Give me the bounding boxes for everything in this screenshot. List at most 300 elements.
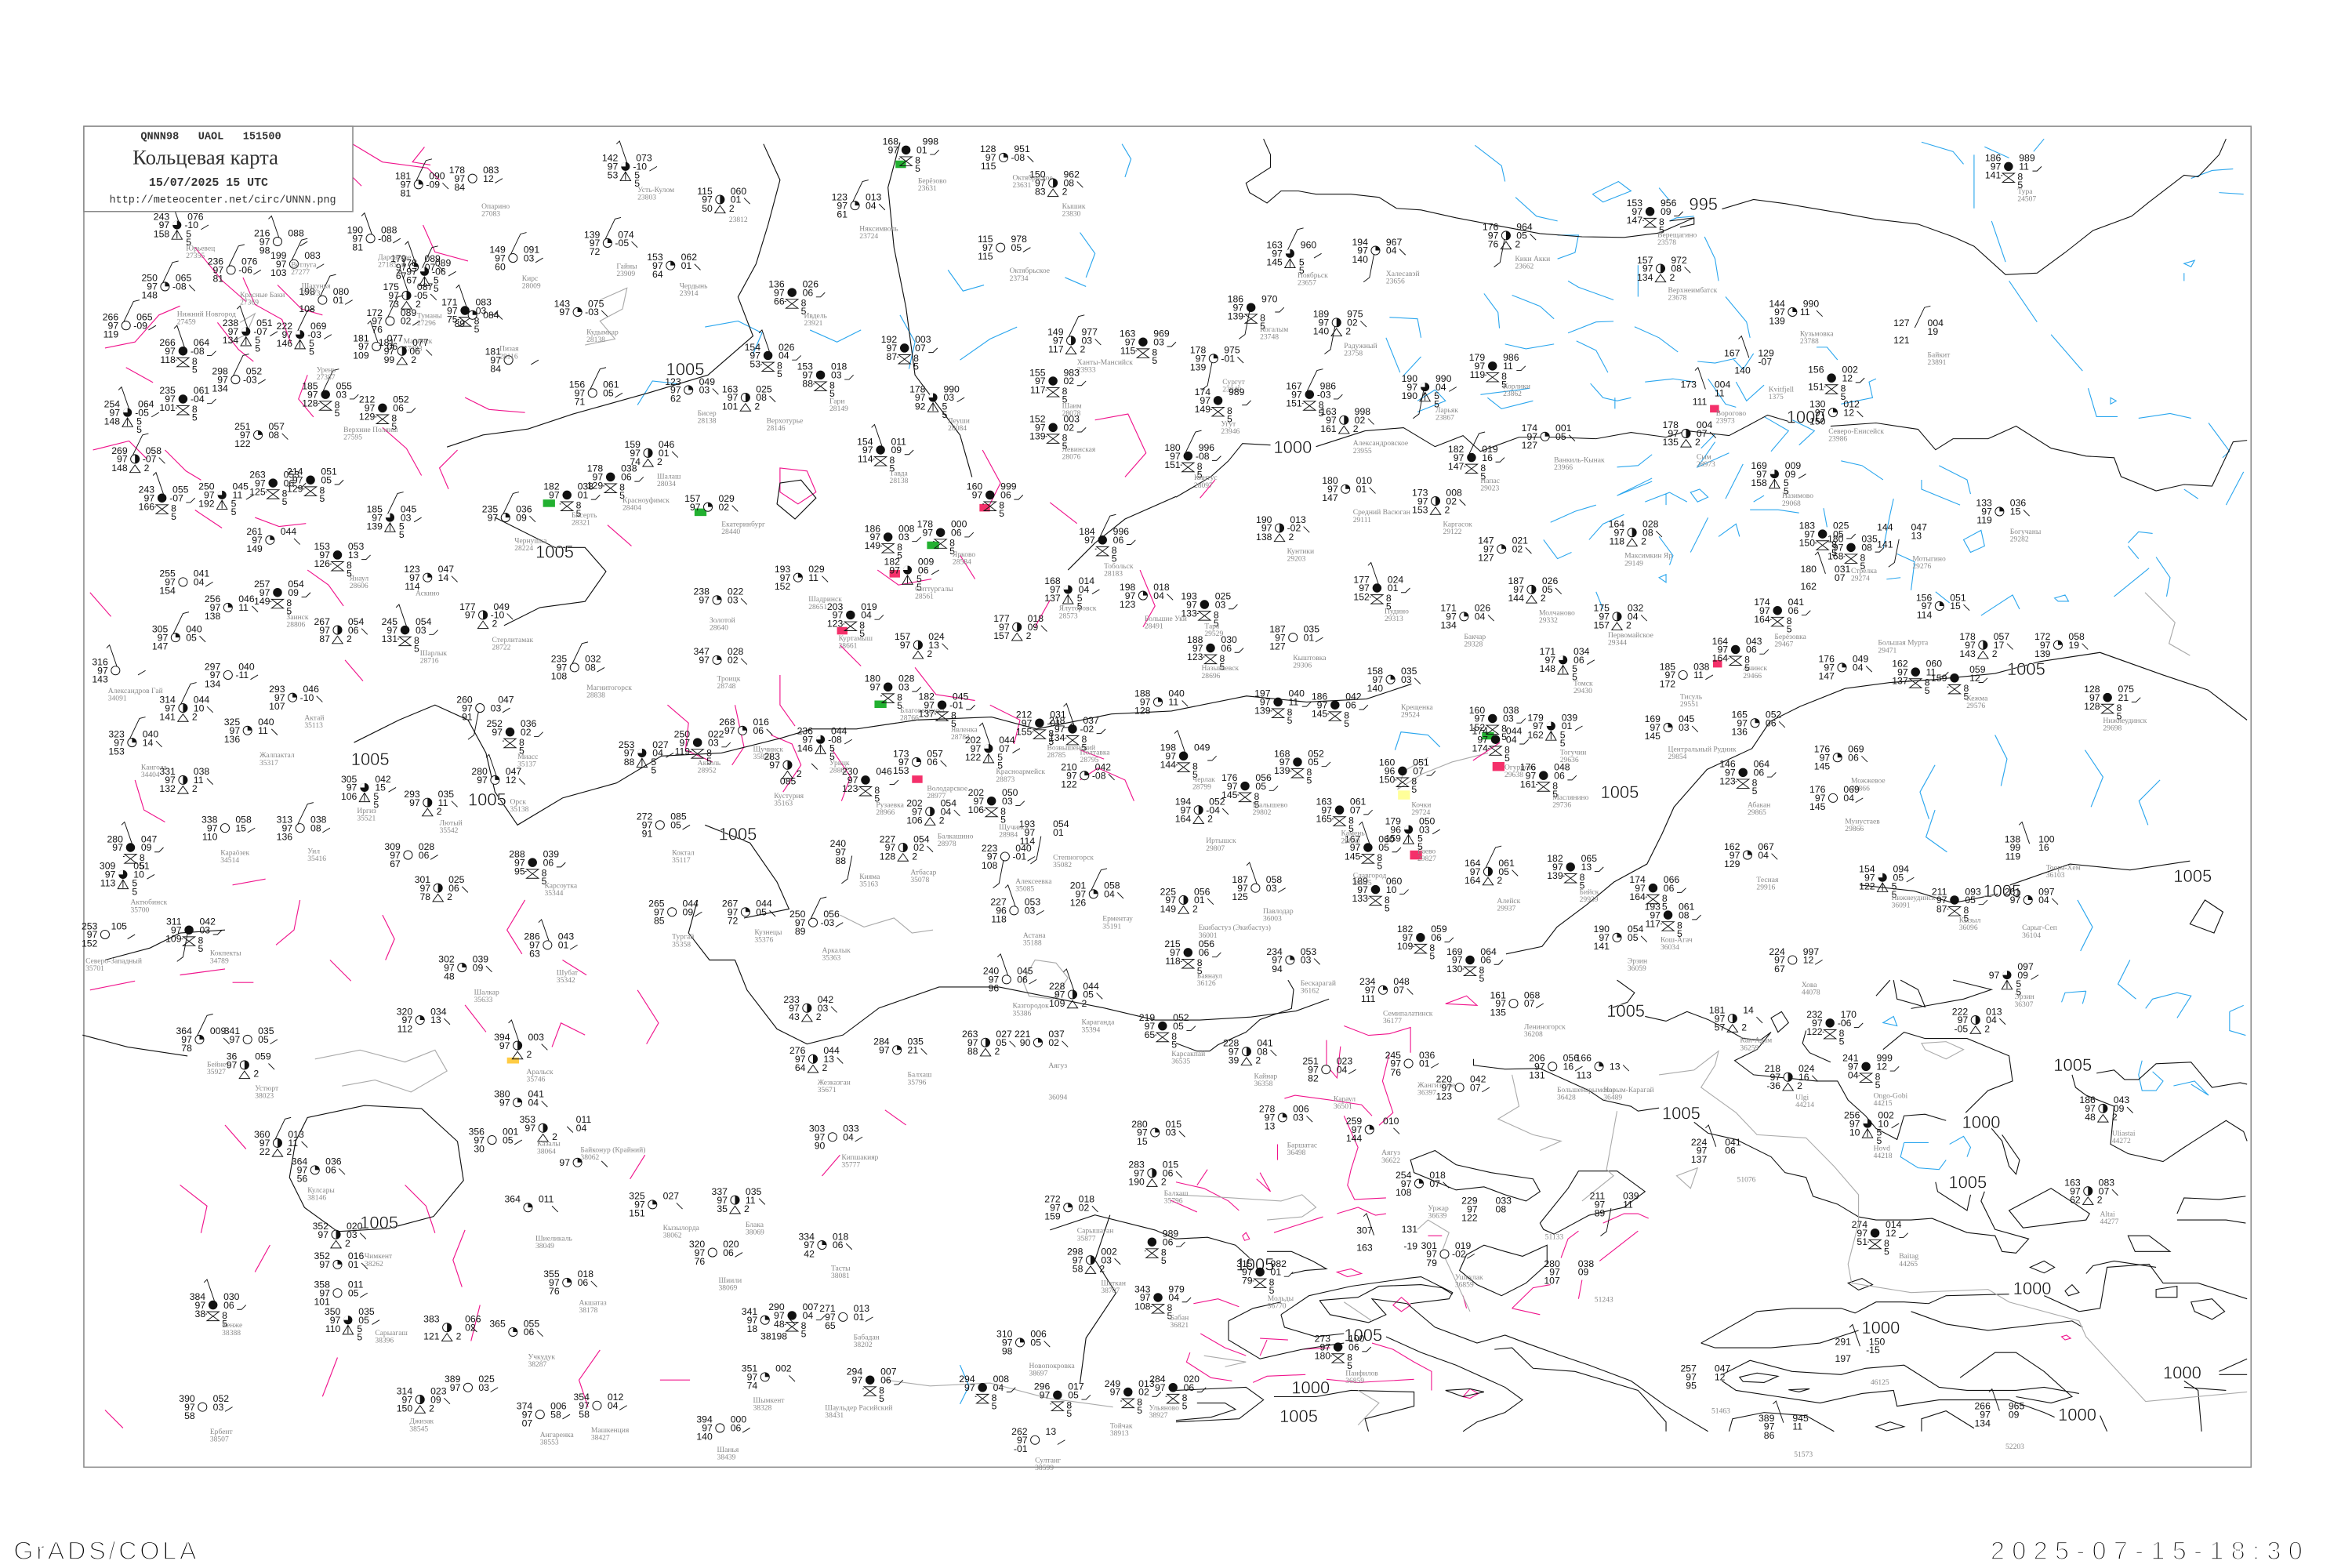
station 36639b [1396, 1170, 1449, 1221]
station 27369: 97 [212, 265, 223, 276]
contour labels: 1000 [1962, 1112, 2001, 1132]
station 27277: 27277 [291, 268, 310, 277]
station 23748: 23748 [1260, 332, 1279, 341]
station 28225: 235 [482, 503, 498, 514]
station 36859 panfilov: 100 [1348, 1333, 1365, 1344]
station 240 [983, 954, 1036, 994]
station 36177b: Семипалатинск [1383, 1009, 1433, 1018]
station 27355: -10 [184, 220, 198, 230]
station 23862: 11 [1503, 361, 1513, 372]
station 23933: Ханты-Мансийск [1077, 358, 1133, 367]
station 338: 110 [202, 831, 218, 842]
station 23909 [584, 217, 637, 278]
station 280b: 12 [506, 775, 517, 786]
station 36770: Мольды [1268, 1294, 1294, 1303]
station 23758: 189 [1313, 309, 1329, 320]
station 257: 047 [1715, 1363, 1730, 1374]
station 186: 186 [865, 523, 880, 534]
station 28966: Рузаевка [876, 800, 905, 809]
station 320: 97 [402, 1014, 412, 1025]
station 36358: Кайнар [1254, 1073, 1277, 1081]
station 29466: 97 [1717, 644, 1728, 655]
station 29551: 038 [1693, 661, 1710, 672]
station 35363: Аркалык [822, 946, 851, 955]
station 232: 170 [1841, 1009, 1857, 1020]
station 243b: 97 [143, 492, 154, 503]
station 28661: 203 [827, 601, 843, 612]
station 28716: 131 [382, 633, 397, 644]
station 255 [159, 568, 213, 597]
station 28748: 028 [728, 646, 744, 657]
station 28977: 28977 [927, 792, 946, 800]
station 23657: 960 [1301, 240, 1316, 251]
contour labels: 1005 [2173, 866, 2212, 886]
station 46125: 150 [1869, 1336, 1886, 1347]
station 44214: -36 [1766, 1080, 1780, 1091]
station 115: 01 [731, 194, 742, 205]
station 36729: 58 [1073, 1263, 1083, 1274]
station 23921: 23921 [804, 319, 823, 328]
station 27369: 236 [208, 256, 223, 267]
station 44265: 51 [1857, 1236, 1867, 1247]
station 29068: 09 [1785, 469, 1796, 480]
station 36729: 298 [1067, 1246, 1083, 1257]
station 23678: 157 [1637, 255, 1653, 266]
station 38178: 018 [578, 1269, 593, 1279]
station 29736: 048 [1554, 761, 1570, 772]
station 29149: 118 [1610, 536, 1624, 547]
station 147: 021 [1512, 535, 1528, 546]
station 29945: 164 [1629, 891, 1646, 902]
station 36034: 36034 [1661, 943, 1679, 952]
station 51133: 280 [1544, 1258, 1560, 1269]
station 252: Миасс [517, 753, 538, 761]
station 38545: 38545 [409, 1425, 428, 1433]
station 29282 [1976, 498, 2042, 544]
station 38431: 97 [852, 1374, 862, 1385]
station 229: 08 [1496, 1203, 1506, 1214]
station 29916 [1724, 841, 1779, 892]
station 28138b: 97 [862, 445, 873, 456]
station 28146: 101 [722, 401, 739, 412]
station 338: Караöзек [220, 849, 250, 858]
station 147: 02 [1512, 543, 1523, 554]
station 1375: 167 [1724, 347, 1740, 358]
station 28138: -03 [585, 307, 599, 318]
station 36489: 113 [1576, 1070, 1592, 1081]
station 35078: Атбасар [910, 868, 937, 877]
station 27355: Юрьевец [186, 245, 215, 253]
station 28146: 28146 [767, 424, 786, 433]
contour labels: 1005 [351, 750, 390, 769]
station 351: Шымкент [753, 1396, 785, 1405]
station 36397: Жангизтобе [1417, 1081, 1455, 1090]
station 23909: 72 [590, 246, 601, 257]
station 27369: 076 [241, 256, 258, 267]
station 35394 [1012, 969, 1115, 1034]
station 23849: 97 [1196, 353, 1206, 364]
station 351: 74 [747, 1381, 757, 1392]
contour labels: 1000 [1787, 408, 1825, 427]
station 36738: 15 [1137, 1136, 1148, 1147]
station 29529 [1181, 590, 1237, 638]
station 250b: 192 [198, 499, 215, 510]
station 44277: 163 [2064, 1177, 2081, 1188]
station 29274: 29274 [1851, 574, 1870, 583]
station 263b: 263 [962, 1029, 978, 1040]
station 341: 97 [230, 1034, 240, 1045]
station 34789: 109 [165, 934, 182, 945]
station 114 [404, 564, 458, 598]
station 314: 044 [194, 694, 209, 705]
station 35777: 303 [809, 1123, 825, 1134]
station 23914: 97 [652, 260, 663, 271]
station 29328b: Бакчар [1464, 633, 1486, 641]
station 23914: 062 [681, 252, 697, 263]
station 28116: 28116 [499, 352, 518, 361]
grey coastlines south-east traced [1176, 1042, 2247, 1425]
station 28116 [485, 345, 539, 374]
station 28873: 202 [965, 735, 981, 746]
station 29344: 04 [1628, 612, 1639, 622]
station 28573b: 018 [1028, 613, 1044, 624]
station 36489 [1576, 1053, 1654, 1102]
station 28978: 054 [941, 797, 956, 808]
station 27595: Верхние Поляны [343, 426, 398, 434]
station 29466: 164 [1712, 636, 1728, 647]
station 28785: 212 [1016, 710, 1033, 720]
station 162 [1892, 658, 1948, 696]
station 23631: 998 [923, 136, 938, 147]
station 36498: 03 [1293, 1112, 1304, 1123]
station 320b: 020 [723, 1239, 739, 1250]
station 35085: 35085 [1015, 884, 1034, 893]
station 28009: 091 [524, 244, 539, 255]
station 28097 [1164, 430, 1221, 490]
station 36094 [1014, 1029, 1068, 1102]
station 23758: 975 [1347, 309, 1363, 320]
station 131: 131 [1402, 1224, 1417, 1235]
station 35085: -01 [1012, 851, 1026, 862]
station 294b [959, 1374, 1015, 1412]
station 115 [697, 186, 750, 224]
station 35927: Бейнет [207, 1060, 230, 1069]
station 27296: Туманы [417, 312, 442, 321]
station 36729: 38707 [1101, 1287, 1120, 1295]
station 27369: -06 [238, 265, 252, 276]
station 250b: 045 [233, 481, 249, 492]
station 360: 013 [288, 1129, 304, 1140]
station 35188: Астана [1023, 931, 1046, 940]
station 27373: 080 [333, 286, 349, 297]
station 35163: Кустурия [774, 792, 804, 800]
station 23867: Ларьяк [1436, 406, 1458, 415]
station 288 [509, 848, 578, 898]
station 27632: 27387 [317, 373, 336, 382]
station 154: 04 [779, 350, 789, 361]
station 186: 008 [898, 523, 915, 534]
station 29149: Максимкин Яр [1624, 552, 1672, 561]
station 28039: 108 [551, 671, 567, 682]
station 36162 [1266, 946, 1336, 996]
station 34700: 10 [133, 869, 144, 880]
station 29724: 29724 [1411, 808, 1430, 817]
station 29306: 187 [1269, 623, 1286, 634]
station 38202: 013 [854, 1303, 869, 1314]
station 28552: 182 [884, 556, 900, 567]
station 23656: Халесавэй [1386, 270, 1420, 278]
station 29864: 97 [1725, 768, 1736, 779]
station 35927: 78 [181, 1043, 192, 1054]
station 35342: 01 [558, 940, 569, 951]
station 38178: 76 [549, 1286, 560, 1297]
station 218: 218 [1049, 715, 1065, 726]
station 38545: Джизак [409, 1417, 434, 1426]
station 36639b: 108 [1396, 1187, 1412, 1198]
station 28606: 153 [314, 541, 330, 552]
station 35163: 283 [764, 751, 780, 762]
station 36770: 01 [1271, 1267, 1281, 1278]
station 29430: 29430 [1573, 687, 1592, 695]
station 28039: 235 [551, 654, 567, 665]
station 23955: 998 [1355, 406, 1370, 417]
station 257 [254, 579, 310, 630]
station 27355 [154, 199, 215, 260]
station 27355: 076 [187, 211, 204, 222]
station 323: Кангола [141, 764, 168, 772]
station 29928: 97 [1357, 884, 1368, 895]
station 38146 [292, 1156, 345, 1203]
station 229: 229 [1461, 1195, 1478, 1206]
station 36096 [1932, 886, 1987, 932]
station 27296: 089 [401, 307, 416, 318]
station 222: 97 [281, 329, 292, 340]
station 257: 09 [288, 587, 299, 598]
station 36177b: 97 [1365, 985, 1376, 996]
station 28148: Бисер [698, 409, 717, 418]
station 51133: 107 [1544, 1276, 1560, 1287]
station 29636: 162 [1527, 729, 1544, 740]
station 28404: 038 [621, 463, 637, 474]
station 182: 109 [1397, 941, 1413, 952]
station 176b: 176 [1221, 772, 1238, 783]
station 36096: 093 [1965, 886, 1981, 897]
station 147: 127 [1478, 553, 1494, 564]
station 997: 44078 [1802, 988, 1820, 996]
station 38507: 03 [213, 1402, 223, 1413]
station 23955: 02 [1355, 415, 1365, 426]
station 27083: 81 [401, 188, 411, 199]
station 190: -08 [378, 233, 392, 244]
station 44215 [1842, 1053, 1908, 1108]
station 44265: 274 [1852, 1219, 1867, 1230]
station 35342: 63 [529, 949, 540, 960]
station 305: 040 [186, 623, 202, 634]
station 38062: 027 [663, 1191, 679, 1202]
station 35163 [764, 751, 818, 808]
station 23657 [1266, 228, 1328, 288]
station 29631 [1469, 705, 1526, 742]
station 28084: 97 [915, 392, 926, 403]
station 29576: 159 [1931, 673, 1947, 684]
station 23631b: Октябрьское [1012, 174, 1053, 183]
station 36489: 166 [1576, 1053, 1592, 1064]
station 36622: 259 [1346, 1116, 1362, 1127]
station 44218b: 44218 [1874, 1152, 1893, 1160]
station 35796: 35796 [908, 1078, 927, 1087]
station 29122: 97 [1417, 495, 1428, 506]
station 28573b: 97 [999, 622, 1010, 633]
station 29807: 194 [1175, 796, 1191, 807]
station 38439: Шанья [717, 1446, 739, 1454]
station 256: 138 [205, 611, 220, 622]
station 182 [1397, 924, 1454, 962]
station 301: 06 [448, 883, 459, 894]
station 253: 105 [111, 920, 127, 931]
station 29529: 193 [1181, 590, 1197, 601]
station 250c: 250 [674, 728, 690, 739]
station 44214: 44214 [1795, 1101, 1814, 1109]
station 38507: 97 [184, 1402, 195, 1413]
station 29631: 97 [1475, 713, 1485, 724]
station 296 [1034, 1381, 1091, 1419]
station 36259b: 36259 [1740, 1044, 1759, 1052]
station 38069: 11 [746, 1195, 756, 1206]
station 28867: Урицк [829, 759, 850, 768]
station 1375: 140 [1734, 365, 1751, 376]
station 305: 05 [186, 632, 197, 643]
station 23656 [1352, 237, 1420, 286]
station 232 [1806, 1009, 1863, 1047]
station 23758: 140 [1313, 326, 1329, 337]
station 36397: 07 [1470, 1082, 1481, 1093]
station 182: 059 [1431, 924, 1447, 935]
station 23656: 194 [1352, 237, 1368, 248]
station 176b [1221, 772, 1288, 817]
station 28978: 04 [941, 806, 951, 817]
station 27595: 129 [359, 412, 376, 423]
station 23946: 23946 [1221, 427, 1240, 436]
station 27393: 109 [353, 350, 369, 361]
station 28785: -01 [1047, 717, 1061, 728]
station 983: 28078 [1062, 409, 1081, 418]
station 29939: 139 [1547, 870, 1563, 881]
station 280b [471, 754, 529, 814]
station 269: -07 [143, 454, 157, 465]
station 44265: Baitag [1899, 1252, 1918, 1261]
station 36859 panfilov: 36859 [1345, 1377, 1364, 1385]
station 29529: 133 [1181, 608, 1197, 619]
station 29724: Кочки [1411, 800, 1431, 809]
station 28716: 28716 [420, 657, 439, 666]
station 28977: 06 [927, 757, 938, 768]
station 27083: 090 [429, 171, 445, 182]
station 252: 036 [521, 718, 537, 729]
station 214: 05 [321, 474, 332, 485]
station 28748: 97 [699, 655, 710, 666]
station 28034: 97 [630, 448, 641, 459]
station 28491: Большие Уки [1145, 615, 1187, 623]
station 34700: 309 [100, 861, 116, 872]
station 1375: 1375 [1769, 393, 1784, 401]
station 301: 78 [419, 891, 430, 902]
station 51076: 137 [1691, 1154, 1707, 1165]
station 266a: 266 [103, 311, 118, 322]
contour labels: 1005 [1600, 782, 1639, 802]
station 28573b: 157 [993, 630, 1010, 641]
station 36094: 221 [1014, 1029, 1031, 1040]
station 29529: 29529 [1204, 630, 1223, 638]
station 986: 167 [1286, 380, 1302, 391]
station 28640: 97 [699, 595, 710, 606]
station 28138b: 011 [891, 436, 906, 447]
station 29698: 21 [2118, 692, 2129, 703]
station 27632: 128 [302, 397, 318, 408]
chart title: Кольцевая карта [132, 145, 278, 169]
station 36162: 97 [1272, 955, 1283, 966]
station 358: 011 [348, 1279, 364, 1290]
station 28640: Золотой [710, 616, 735, 625]
station 28966: 123 [842, 783, 858, 794]
station 233: 042 [818, 994, 833, 1005]
station 23748: 139 [1228, 311, 1243, 322]
station 38962: Байконур (Крайний) [580, 1145, 645, 1154]
station 185: 045 [401, 503, 416, 514]
station 44265: 12 [1886, 1228, 1896, 1239]
station 35746: 394 [494, 1032, 510, 1043]
station 302: 09 [473, 962, 483, 973]
station 36162: 234 [1266, 946, 1283, 957]
station 35163b: 35163 [859, 880, 878, 889]
station 154 [745, 330, 801, 379]
station 147: 97 [1483, 543, 1494, 554]
station 38178 [543, 1269, 607, 1315]
station 35796: 97 [879, 1044, 890, 1055]
station 296: 017 [1068, 1381, 1084, 1392]
station 182d: Явленка [951, 726, 978, 735]
contour labels: 1005 [1344, 1325, 1382, 1345]
station 23748: 970 [1261, 294, 1278, 305]
station 23803: 073 [636, 153, 652, 164]
station 380: 97 [499, 1097, 510, 1108]
station 29631: 03 [1503, 713, 1514, 724]
station 44272: 97 [2085, 1103, 2096, 1114]
station 229 [1461, 1195, 1512, 1223]
station 323: 14 [143, 737, 154, 748]
station 36859 panfilov: Панфилов [1345, 1369, 1378, 1377]
station 36001: 225 [1160, 886, 1176, 897]
station 197: 11 [1288, 697, 1298, 708]
station 44272: 043 [2114, 1094, 2129, 1105]
station 341b: 97 [747, 1315, 757, 1326]
station 28651: Шадринск [808, 595, 842, 604]
station 29937: 164 [1465, 875, 1481, 886]
station 168: 139 [1274, 765, 1290, 776]
station 310: Новопокровка [1029, 1362, 1075, 1370]
station 320b: 320 [689, 1239, 705, 1250]
station 23724: 04 [866, 200, 877, 211]
station 176c: Можжевое [1851, 777, 1886, 786]
station 24507: 11 [2019, 162, 2029, 172]
station 28766: 97 [869, 681, 880, 692]
station 29928: 060 [1386, 876, 1402, 887]
station 163: 07 [1350, 804, 1361, 815]
station 997 [1769, 946, 1823, 996]
station 38553: 006 [550, 1401, 567, 1412]
station 38599: 38599 [1035, 1464, 1054, 1472]
station 263: 125 [249, 486, 266, 497]
station 23867: 04 [1436, 382, 1446, 393]
